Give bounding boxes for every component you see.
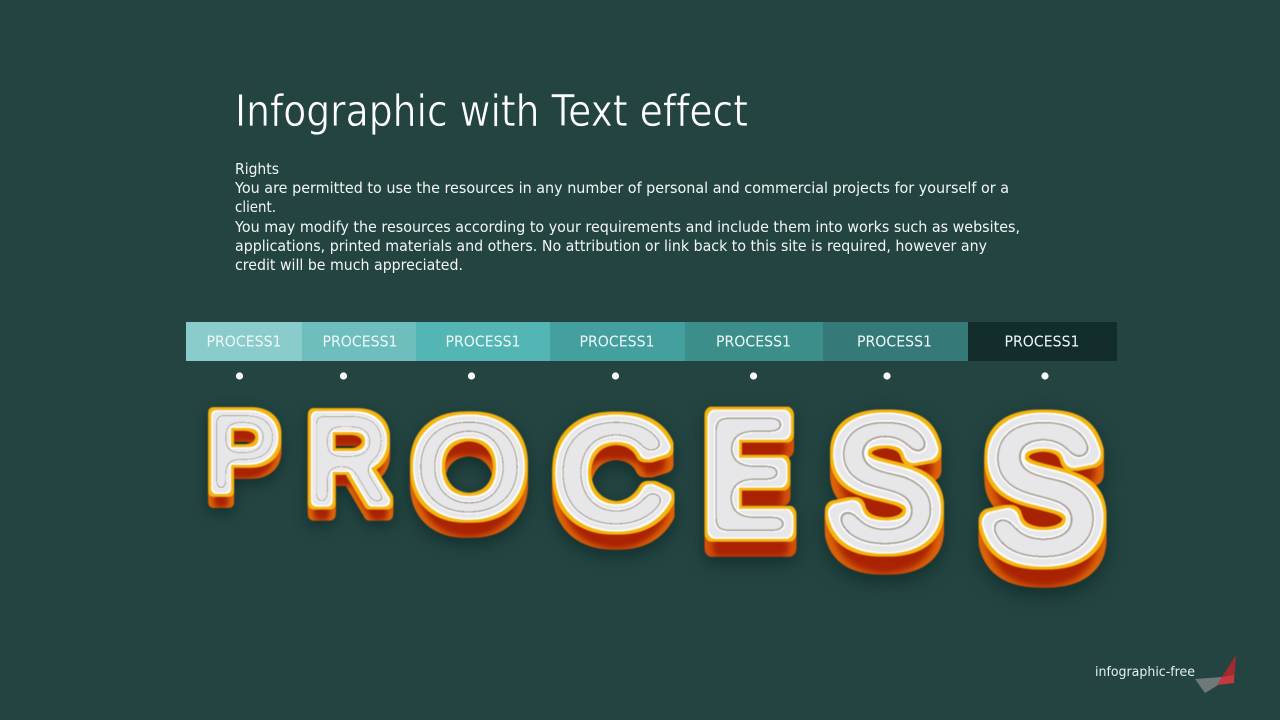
segment 5	[685, 322, 823, 361]
segment 7	[968, 322, 1117, 361]
segment 5: PROCESS1	[716, 332, 791, 350]
text block: rights: You may modify the resources according to your requirements and include them into works such as websites,	[234, 218, 1020, 236]
segment 4	[550, 322, 685, 361]
segment 2: PROCESS1	[322, 332, 398, 350]
3D word: PROCESS	[207, 384, 1101, 593]
text block: rights	[234, 160, 1020, 274]
letter P: P	[207, 391, 279, 512]
process bar	[186, 322, 1117, 361]
letter S: S	[830, 389, 938, 579]
letter R: R	[307, 391, 390, 527]
text block: rights: applications, printed materials and others. No attribution or link back to this site is required, however any	[235, 237, 987, 255]
segment 3	[416, 322, 550, 361]
segment 3: PROCESS1	[446, 332, 520, 350]
icon: brand mark	[1195, 655, 1236, 693]
text block: rights: client.	[235, 198, 276, 216]
text block: rights: You are permitted to use the resources in any number of personal and commercial projects for yourself or a	[234, 179, 1009, 197]
segment 2	[302, 322, 416, 361]
segment 7: PROCESS1	[1004, 332, 1080, 350]
segment 4: PROCESS1	[580, 332, 654, 350]
segment 6	[823, 322, 968, 361]
segment 1	[186, 322, 302, 361]
segment 6: PROCESS1	[857, 332, 932, 350]
letter S: S	[985, 387, 1101, 593]
marker dots	[236, 372, 1049, 380]
segment 1: PROCESS1	[206, 332, 282, 350]
title: Infographic with Text effect	[235, 86, 748, 137]
letter O: O	[414, 396, 524, 540]
text block: rights: Rights	[235, 160, 279, 178]
brand label: infographic-free	[1095, 664, 1195, 680]
letter E: E	[708, 384, 789, 565]
letter C: C	[556, 394, 668, 553]
text block: rights: credit will be much appreciated.	[235, 256, 463, 274]
